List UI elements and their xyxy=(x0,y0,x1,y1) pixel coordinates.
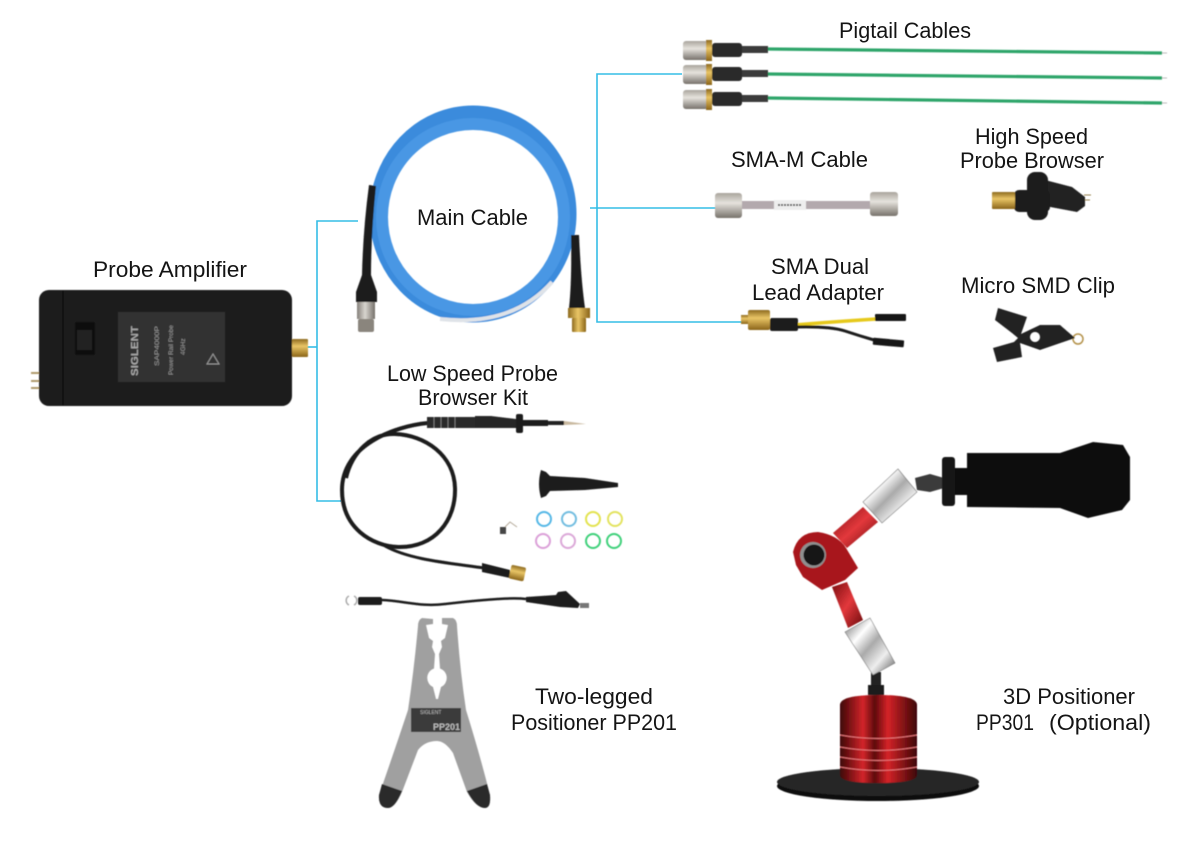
label: micro SMD clip: Micro SMD Clip xyxy=(961,273,1115,298)
icon: base stud xyxy=(868,672,884,695)
label: 3D positioner xyxy=(976,684,1151,735)
icon: amplifier body xyxy=(39,290,292,406)
pigtail cables xyxy=(683,40,1167,110)
label: pigtail cables: Pigtail Cables xyxy=(839,18,971,43)
main cable xyxy=(356,112,590,332)
icon: amplifier switch xyxy=(75,322,95,355)
icon: SMA end connector xyxy=(482,563,526,582)
label: SMA dual lead adapter xyxy=(752,254,884,305)
amplifier label plate: SIGLENT xyxy=(130,326,141,376)
label: SMA-M cable: SMA-M Cable xyxy=(731,147,868,172)
icon: probe tip cover xyxy=(539,470,618,498)
pigtail cable 2 xyxy=(683,64,1167,85)
icon: lower chrome sleeve xyxy=(845,618,895,675)
icon: ground lead with clip xyxy=(346,591,589,608)
icon: spring contact xyxy=(500,522,517,534)
icon: upper chrome sleeve xyxy=(863,469,917,523)
label: two-legged positioner: Positioner PP201 xyxy=(511,710,677,735)
icon: micro SMD clip xyxy=(993,308,1083,362)
cable white band xyxy=(440,282,552,320)
label: 3D positioner: PP301 xyxy=(976,710,1034,735)
label: SMA dual lead adapter: Lead Adapter xyxy=(752,280,884,305)
amplifier label plate: SAP4000P xyxy=(154,326,161,366)
positioner name plate xyxy=(411,708,461,732)
label: two-legged positioner: Two-legged xyxy=(535,684,653,709)
icon: probe coiled cable xyxy=(342,423,484,568)
label: two-legged positioner xyxy=(511,684,677,735)
icon: left black boot and steel connector xyxy=(356,185,377,332)
low speed probe browser kit xyxy=(342,414,622,608)
icon: positioner gray frame xyxy=(379,618,490,808)
two-legged positioner PP201 xyxy=(379,618,490,808)
positioner name plate: SIGLENT xyxy=(420,710,441,716)
SMA dual lead adapter xyxy=(741,310,906,347)
label: high speed probe browser: Probe Browser xyxy=(960,148,1104,173)
icon: high speed probe browser xyxy=(992,172,1091,220)
pigtail cable 3 xyxy=(683,89,1167,110)
icon: probe handle xyxy=(427,414,586,433)
connector lines xyxy=(304,74,744,501)
icon: right black boot and gold connector xyxy=(568,235,590,332)
3D positioner PP301 xyxy=(777,442,1130,801)
label: 3D positioner: 3D Positioner xyxy=(1003,684,1135,709)
label: low speed probe browser kit: Browser Kit xyxy=(418,385,528,410)
icon: amplifier SMA connector xyxy=(292,339,308,357)
icon: round black base xyxy=(777,768,979,801)
icon: red cylinder weight xyxy=(840,695,917,783)
icon: colored rings xyxy=(536,512,622,548)
positioner name plate: PP201 xyxy=(433,722,460,732)
amplifier label plate xyxy=(118,312,225,382)
icon: red joint with dark cap xyxy=(793,532,858,590)
icon: ball joint and knob xyxy=(915,457,967,506)
icon: blue cable coil xyxy=(376,112,570,316)
label: 3D positioner: (Optional) xyxy=(1049,710,1151,735)
icon: black clamp xyxy=(967,442,1130,518)
icon: rubber tips xyxy=(379,784,490,808)
amplifier label plate: Power Rail Probe xyxy=(168,325,175,375)
pigtail cable 1 xyxy=(683,40,1167,61)
icon: lower red arm xyxy=(832,582,863,628)
SMA-M cable xyxy=(715,192,898,218)
icon: amplifier pins xyxy=(31,372,40,389)
label: probe amplifier: Probe Amplifier xyxy=(93,257,247,282)
label: low speed probe browser kit xyxy=(387,361,558,410)
label: low speed probe browser kit: Low Speed Probe xyxy=(387,361,558,386)
label: SMA dual lead adapter: SMA Dual xyxy=(771,254,869,279)
label: main cable: Main Cable xyxy=(417,205,528,230)
probe amplifier xyxy=(31,290,308,406)
icon: upper red arm xyxy=(833,507,878,548)
amplifier label plate: 4GHz xyxy=(180,338,187,355)
label: high speed probe browser xyxy=(960,124,1104,173)
label: high speed probe browser: High Speed xyxy=(975,124,1088,149)
